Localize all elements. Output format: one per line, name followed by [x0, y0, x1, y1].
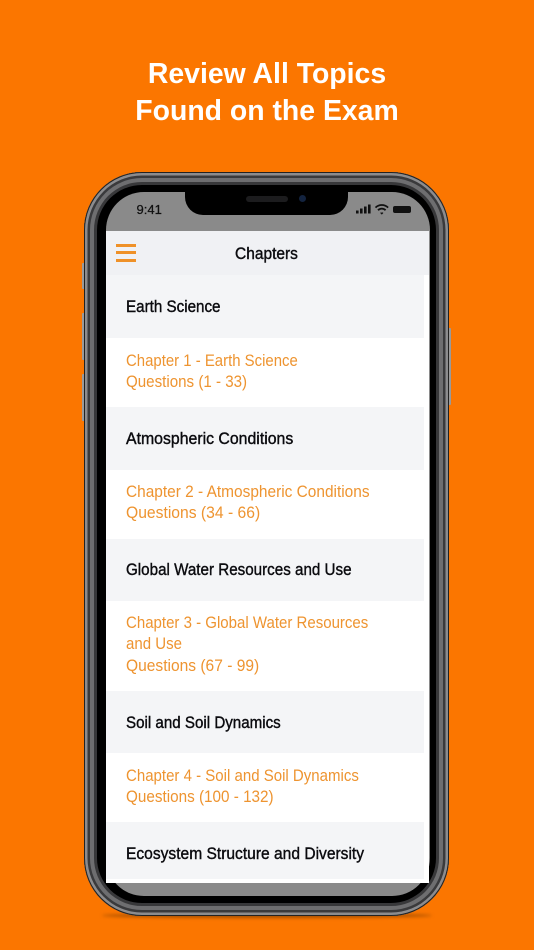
chapter list — [106, 275, 429, 883]
section band: earth science — [106, 275, 424, 338]
section band: soil — [106, 691, 424, 753]
text: chapter 4: Questions (100 - 132) — [126, 788, 273, 806]
speaker — [246, 196, 288, 202]
heading: global water: Global Water Resources and Use — [126, 561, 351, 579]
status time: 9:41 — [136, 202, 162, 216]
text: chapter 4 — [126, 767, 358, 806]
text: chapter 3 — [126, 614, 368, 675]
signal bars — [356, 204, 371, 214]
nav bar — [106, 231, 429, 275]
side buttons — [82, 263, 85, 289]
icon: hamburger menu — [116, 244, 136, 262]
status icons — [356, 204, 411, 214]
text: chapter 1: Chapter 1 - Earth Science — [126, 352, 297, 370]
title: Found on the Exam — [135, 94, 399, 126]
text: chapter 2 — [126, 483, 369, 522]
notch — [185, 190, 348, 215]
heading: ecosystem: Ecosystem Structure and Diversity — [126, 845, 364, 863]
section band: ecosystem — [106, 822, 424, 879]
title — [135, 58, 399, 126]
text: chapter 1: Questions (1 - 33) — [126, 373, 247, 391]
text: chapter 4: Chapter 4 - Soil and Soil Dynamics — [126, 767, 358, 785]
wifi — [376, 205, 388, 214]
nav title: Chapters — [235, 245, 298, 263]
text: chapter 1 — [126, 352, 298, 391]
phone frame — [84, 172, 449, 916]
text: chapter 2: Questions (34 - 66) — [126, 504, 260, 522]
heading: atmospheric conditions: Atmospheric Conditions — [126, 430, 293, 448]
text: chapter 3: Chapter 3 - Global Water Resources — [126, 614, 368, 632]
text: chapter 3: Questions (67 - 99) — [126, 657, 259, 675]
section band: atmospheric — [106, 407, 424, 470]
title: Review All Topics — [148, 58, 386, 90]
heading: earth science: Earth Science — [126, 298, 220, 316]
text: chapter 2: Chapter 2 - Atmospheric Conditions — [126, 483, 369, 501]
phone shadow — [102, 913, 432, 918]
camera — [299, 195, 306, 202]
battery — [393, 206, 411, 213]
text: chapter 3: and Use — [126, 635, 181, 653]
heading: soil: Soil and Soil Dynamics — [126, 714, 280, 732]
screen — [106, 192, 430, 896]
section band: water — [106, 539, 424, 601]
